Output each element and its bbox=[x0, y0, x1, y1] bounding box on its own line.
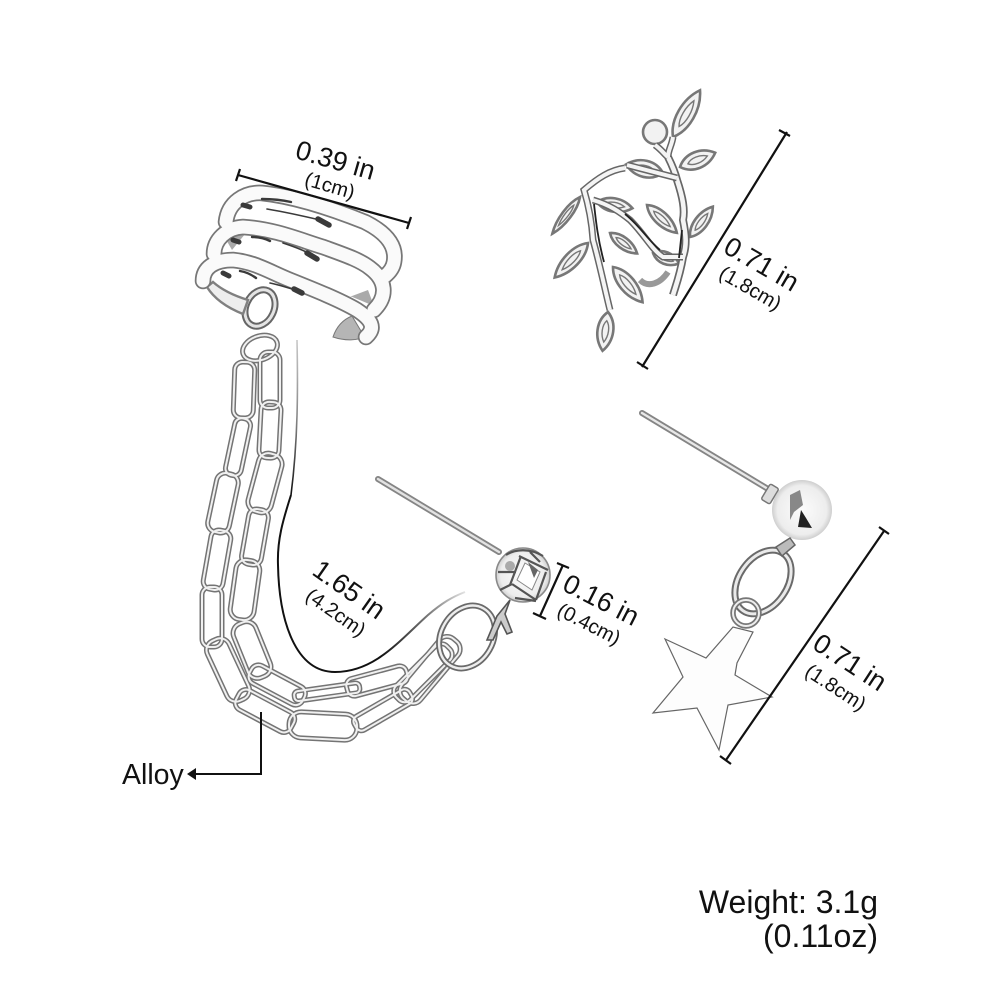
oval jump ring bbox=[723, 540, 803, 624]
weight note: (0.11oz) bbox=[763, 918, 878, 954]
cuff rings bbox=[203, 193, 394, 340]
top jump ring bbox=[239, 285, 281, 331]
post bbox=[378, 479, 499, 552]
dimension: cuff width: (1cm) bbox=[302, 169, 357, 204]
large jump ring bbox=[428, 595, 506, 679]
crystal ball bbox=[496, 548, 550, 602]
collar bbox=[761, 484, 779, 504]
callout: material: Alloy bbox=[122, 759, 185, 791]
dimension: leaf cuff height: (1.8cm) bbox=[715, 262, 785, 315]
band reflections bbox=[223, 199, 329, 293]
stud earring with crystal bbox=[378, 479, 550, 602]
post bbox=[642, 413, 768, 489]
dimension: star drop length bbox=[720, 527, 892, 764]
small jump ring bbox=[733, 600, 759, 626]
measurement curve: chain length bbox=[278, 340, 465, 672]
leaf ear cuff bbox=[549, 86, 718, 352]
weight note bbox=[699, 884, 878, 954]
dimension: cuff width: 0.39 in bbox=[292, 135, 379, 186]
clasp joining chain to stud bbox=[487, 600, 512, 640]
dimension: star drop length: 0.71 in bbox=[808, 628, 892, 697]
dimension: crystal diameter: 0.16 in bbox=[558, 568, 644, 632]
arrow head bbox=[187, 768, 196, 780]
dimension: leaf cuff height: 0.71 in bbox=[719, 231, 804, 297]
dimension: chain length: (4.2cm) bbox=[301, 585, 370, 642]
ear cuff with chain bbox=[202, 193, 512, 741]
chain links bbox=[202, 331, 464, 741]
weight note: Weight: 3.1g bbox=[699, 884, 878, 920]
dimension: crystal diameter bbox=[533, 563, 644, 650]
metal ball bbox=[772, 480, 832, 540]
dimension: crystal diameter: (0.4cm) bbox=[554, 599, 624, 650]
dimension: cuff width bbox=[236, 135, 411, 229]
dimension: star drop length: (1.8cm) bbox=[801, 660, 870, 716]
dimension: chain length: 1.65 in bbox=[307, 554, 391, 625]
stud earring with star drop bbox=[642, 413, 832, 750]
star pendant bbox=[653, 627, 772, 750]
dimension: leaf cuff height bbox=[637, 130, 804, 369]
callout: material bbox=[122, 712, 261, 791]
